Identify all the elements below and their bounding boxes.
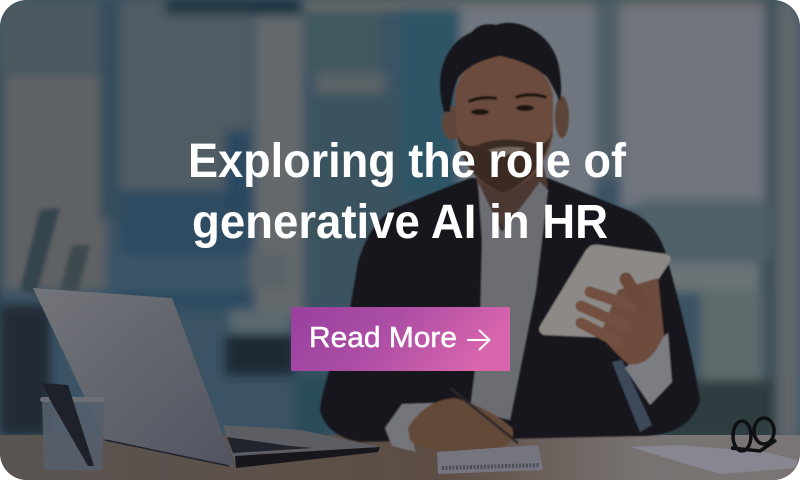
eyes and brows [468,93,547,115]
left cuff [385,403,434,452]
right cuff [625,333,672,405]
left ear [442,105,458,140]
holding hand [581,278,664,364]
button: read more [291,307,510,371]
table [0,435,800,480]
notebook [437,445,543,474]
smile [488,147,525,155]
person [320,23,700,452]
pen cup [40,383,105,470]
shirt [470,182,548,420]
glasses [731,418,776,451]
stubble beard [457,130,553,193]
fingers [581,292,632,342]
suit [320,178,700,442]
cup rim [40,397,105,402]
sleeve lining [612,360,652,432]
pen [450,388,518,443]
hair [440,23,561,112]
lid edge [105,440,229,466]
button label: Read More [309,322,457,354]
icon: arrow [467,330,490,350]
neck [476,162,548,230]
laptop lid [33,288,235,467]
thumb [619,272,638,289]
papers [630,445,797,474]
title: Exploring the role of [188,135,627,188]
pens [42,383,94,466]
tablet [539,245,671,338]
right ear [555,96,569,138]
laptop base [223,425,380,466]
face [455,55,553,193]
keyboard [227,437,313,453]
title: generative AI in HR [192,196,608,249]
writing hand [408,398,513,452]
title [188,135,627,249]
hinge edge [235,447,380,468]
laptop [33,288,380,468]
